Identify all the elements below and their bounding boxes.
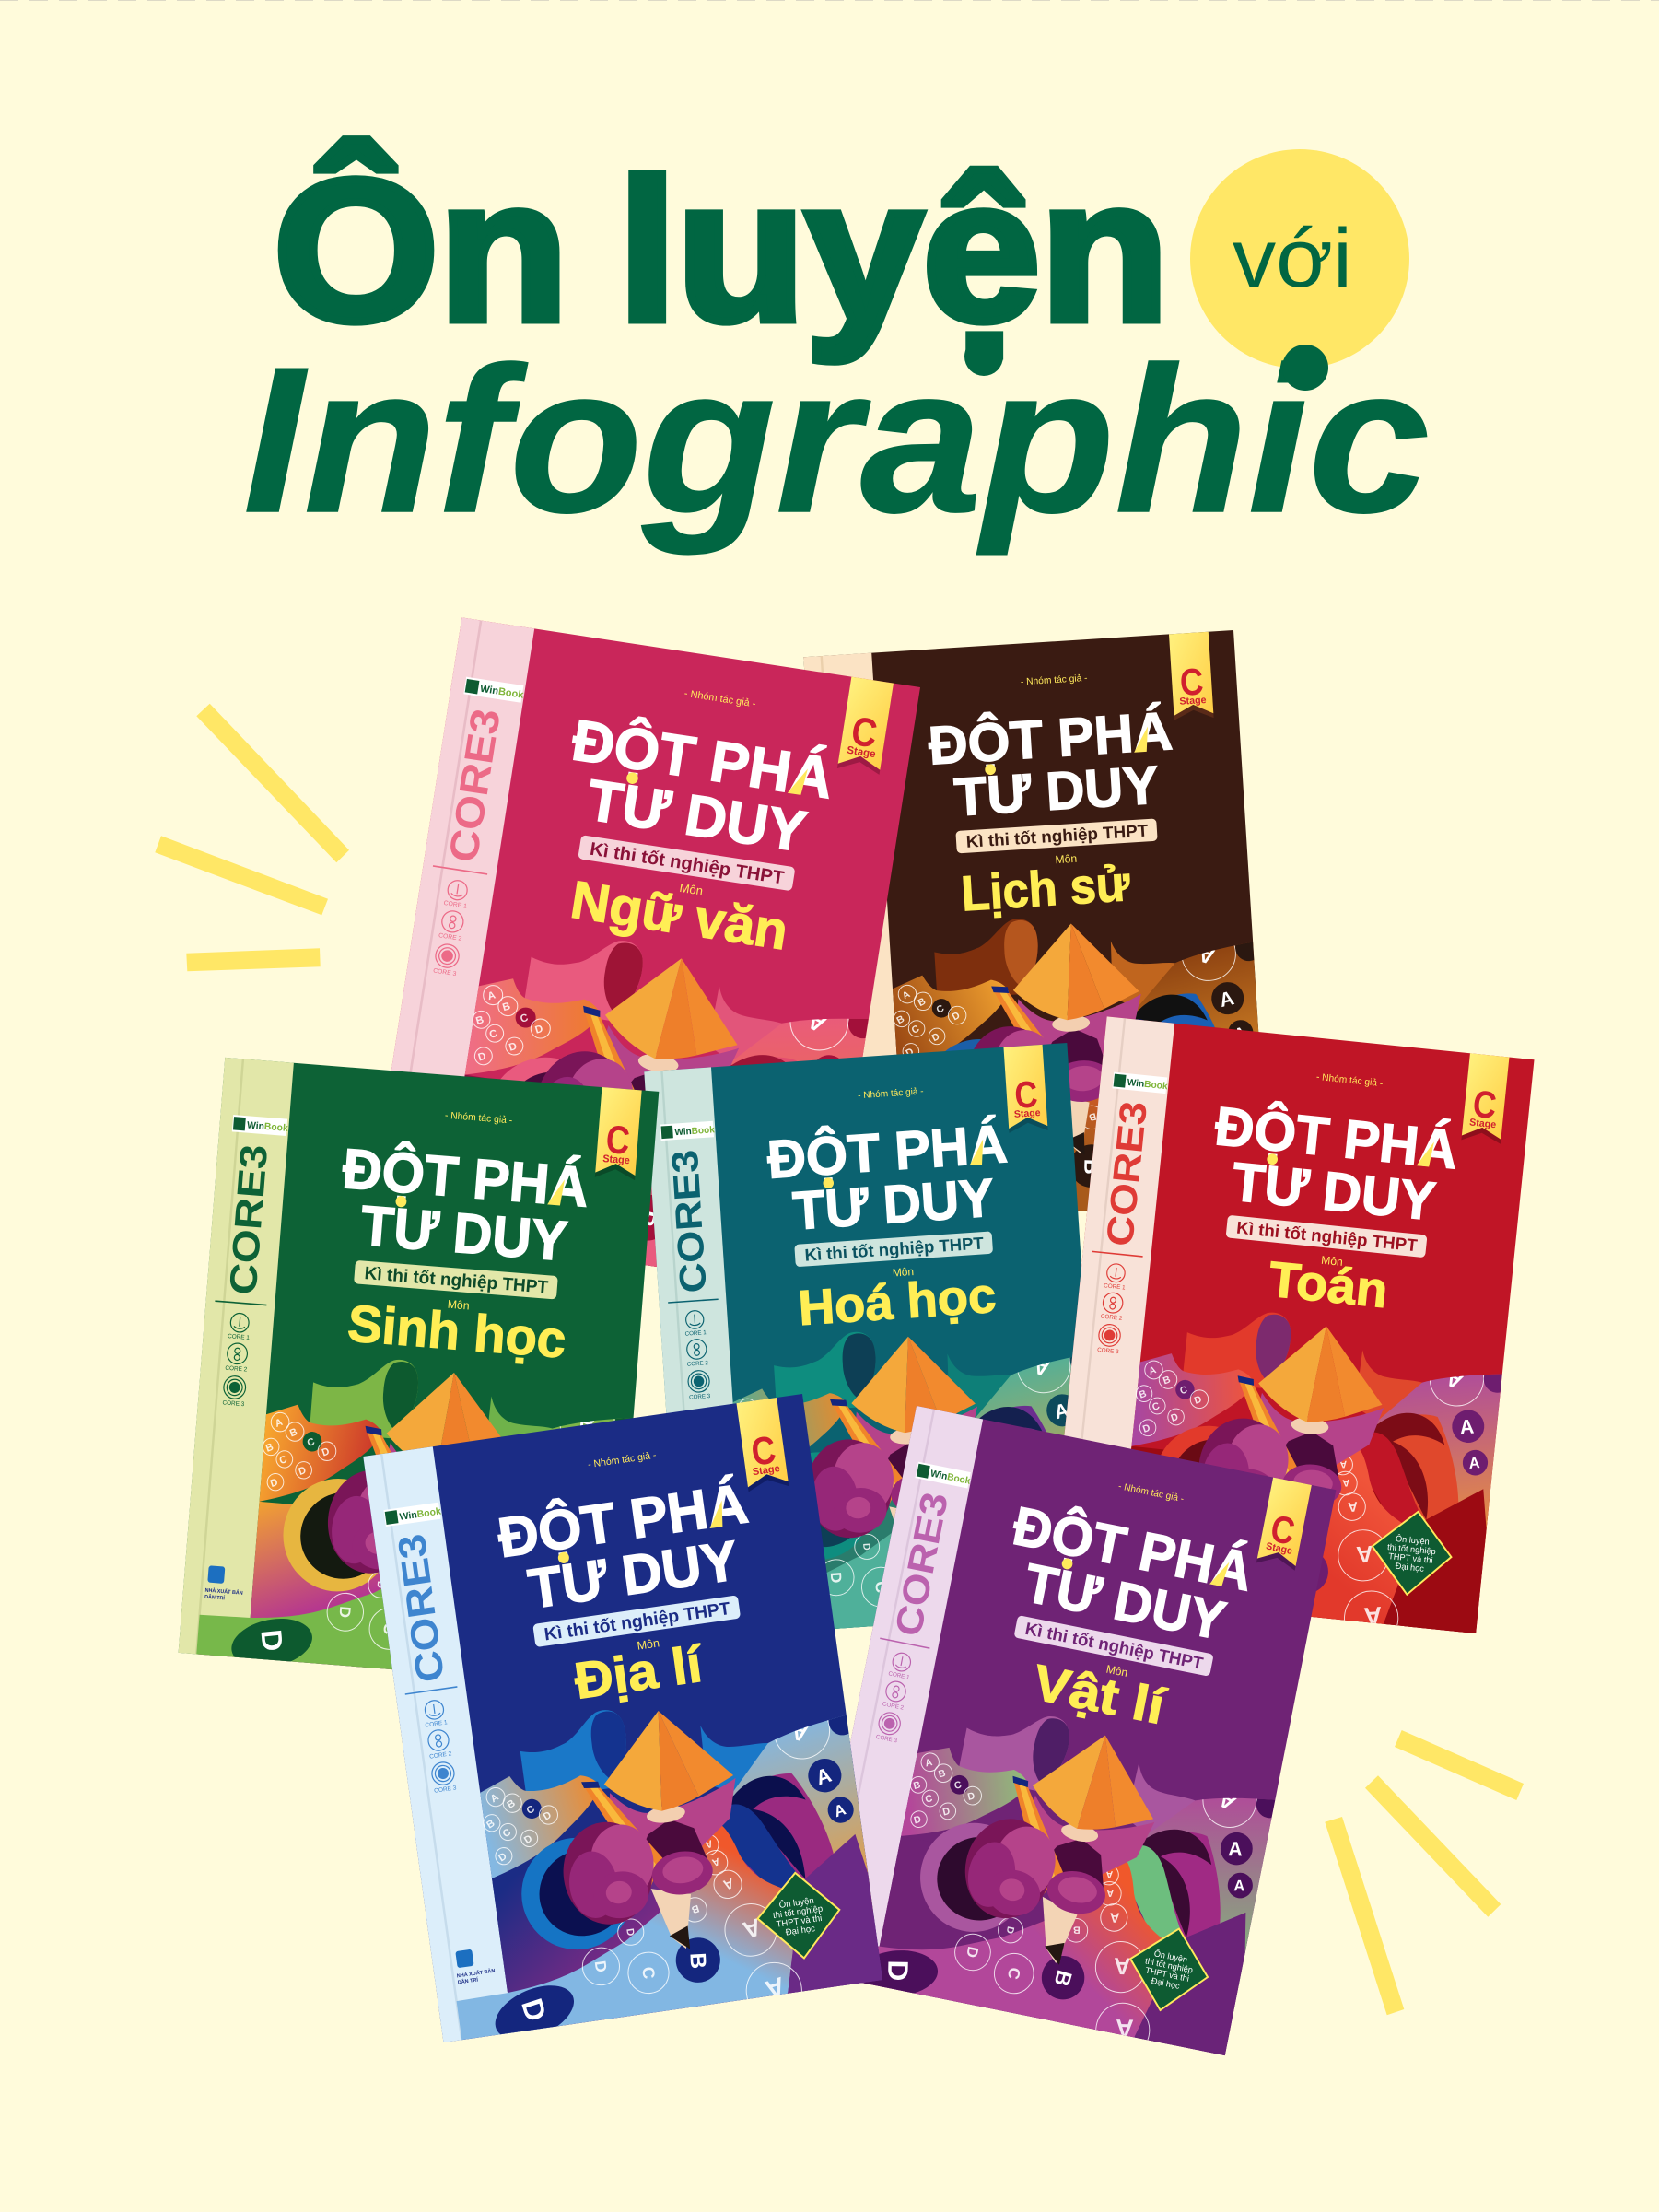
series title: ĐỘT PHÁ: [765, 1114, 1010, 1190]
stage bookmark: C: [1179, 660, 1205, 704]
illustration: [383, 912, 884, 1317]
spine: [805, 1406, 983, 1984]
series title: TƯ DUY: [1020, 1552, 1231, 1652]
series title: TƯ DUY: [952, 755, 1161, 827]
book: Sinh học: [177, 1058, 668, 1711]
spine: WinBook: [399, 1505, 442, 1523]
cover background: [368, 617, 920, 1293]
subject: Toán: [1267, 1251, 1390, 1318]
cover background: [179, 1058, 659, 1687]
subject: Môn: [1105, 1662, 1129, 1679]
illustration: [420, 1675, 895, 2063]
cover background: [1048, 1016, 1535, 1633]
spine: [363, 1446, 513, 2042]
badge: Ôn luyện: [778, 1896, 814, 1911]
stage bookmark: Stage: [846, 745, 877, 760]
illustration: [1064, 1294, 1515, 1656]
yellow circle behind "với": [1190, 149, 1409, 369]
stage bookmark: C: [848, 708, 881, 756]
illustration: [680, 1316, 1114, 1660]
spine: [1048, 1016, 1174, 1598]
badge: thi tốt nghiệp: [1387, 1542, 1436, 1556]
stage bookmark: Stage: [602, 1153, 630, 1166]
spine: CORE 1: [443, 900, 467, 910]
title line 2: Infographic: [243, 323, 1430, 556]
stage bookmark: C: [604, 1117, 631, 1163]
spine: CORE 3: [875, 1734, 898, 1745]
illustration: [819, 1682, 1291, 2079]
series title: ĐỘT PHÁ: [1212, 1094, 1461, 1181]
spine: CORE3: [887, 1489, 956, 1640]
stage bookmark: Stage: [1179, 695, 1207, 708]
stage bookmark: Stage: [1265, 1540, 1293, 1557]
subject: Môn: [1055, 852, 1078, 866]
badge: Đại học: [1395, 1562, 1425, 1574]
author line: - Nhóm tác giả -: [1117, 1481, 1185, 1504]
book: Hoá học: [644, 1042, 1114, 1662]
series title: TƯ DUY: [583, 767, 811, 864]
subject: Lịch sử: [960, 856, 1131, 921]
author line: - Nhóm tác giả -: [444, 1110, 513, 1127]
book: Lịch sử: [803, 629, 1279, 1248]
stage bookmark: [736, 1398, 789, 1492]
spine: CORE 3: [1097, 1347, 1119, 1355]
stage bookmark: [1256, 1478, 1312, 1571]
subject: Sinh học: [345, 1293, 568, 1369]
subject: Hoá học: [797, 1268, 998, 1336]
exam pill: Kì thi tốt nghiệp THPT: [965, 820, 1150, 851]
spine: CORE 3: [434, 1785, 457, 1795]
badge: [1122, 1921, 1216, 2018]
series title: [559, 707, 837, 867]
author line: - Nhóm tác giả -: [1315, 1072, 1384, 1089]
spine: DÂN TRÍ: [457, 1975, 479, 1986]
decorative rays right: [1325, 1730, 1524, 2015]
title line 1: luyện: [618, 139, 1169, 363]
subject: Môn: [637, 1636, 660, 1653]
author line: - Nhóm tác giả -: [683, 688, 757, 710]
spine: CORE 2: [882, 1701, 905, 1712]
badge: [753, 1867, 846, 1964]
spine: CORE 2: [687, 1360, 709, 1368]
series title: TƯ DUY: [791, 1168, 996, 1242]
spine: CORE 1: [425, 1719, 448, 1729]
illustration: [838, 904, 1279, 1247]
spine: DÂN TRÍ: [204, 1593, 226, 1601]
badge: THPT và thi: [1388, 1551, 1433, 1565]
spine: CORE3: [823, 734, 874, 880]
exam pill: Kì thi tốt nghiệp THPT: [804, 1233, 984, 1265]
cover background: [805, 1406, 1336, 2055]
cover background: [803, 630, 1269, 1226]
series title: [1207, 1094, 1461, 1234]
author line: - Nhóm tác giả -: [587, 1450, 658, 1470]
spine: WinBook: [479, 684, 525, 701]
series title: [494, 1471, 759, 1623]
decorative rays left: [155, 704, 349, 971]
exam pill: Kì thi tốt nghiệp THPT: [1023, 1619, 1206, 1673]
subject: Môn: [1321, 1254, 1344, 1269]
exam pill: Kì thi tốt nghiệp THPT: [589, 839, 786, 888]
badge: Đại học: [785, 1924, 816, 1938]
spine: WinBook: [247, 1119, 288, 1134]
book: Ngữ văn: [364, 617, 929, 1317]
spine: CORE 3: [433, 967, 457, 977]
spine: [644, 1067, 748, 1639]
spine: [368, 617, 534, 1234]
spine: CORE 3: [222, 1399, 245, 1408]
badge: thi tốt nghiệp: [1144, 1956, 1194, 1975]
spine: CORE 1: [1104, 1282, 1126, 1292]
spine: CORE 1: [228, 1333, 250, 1341]
spine: CORE 2: [225, 1365, 248, 1374]
badge: Đại học: [1151, 1976, 1181, 1991]
stage bookmark: C: [1471, 1083, 1499, 1127]
spine: CORE 2: [438, 932, 462, 942]
word: với: với: [1233, 213, 1352, 305]
spine: CORE3: [390, 1531, 452, 1685]
series title: TƯ DUY: [524, 1528, 742, 1621]
cover background: [644, 1043, 1104, 1639]
series title: ĐỘT PHÁ: [340, 1137, 591, 1219]
subject: Môn: [679, 881, 704, 898]
subject: Ngữ văn: [567, 871, 792, 962]
illustration: [194, 1346, 646, 1711]
spine: CORE 2: [429, 1750, 452, 1761]
book: Toán: [1046, 1016, 1543, 1656]
stage bookmark: [1003, 1045, 1048, 1133]
stage bookmark: [1169, 632, 1214, 720]
spine: WinBook: [674, 1125, 716, 1138]
badge: Ôn luyện: [1153, 1949, 1188, 1964]
series title: ĐỘT PHÁ: [567, 707, 837, 811]
stage bookmark: C: [749, 1428, 778, 1474]
spine: CORE3: [440, 706, 509, 865]
badge: [1368, 1507, 1455, 1598]
spine: [179, 1058, 294, 1658]
stage bookmark: [837, 677, 894, 775]
stage bookmark: Stage: [1014, 1107, 1041, 1120]
spine: CORE 1: [888, 1670, 910, 1681]
exam pill: Kì thi tốt nghiệp THPT: [1235, 1217, 1419, 1255]
series title: [998, 1494, 1257, 1656]
book: Vật lí: [801, 1406, 1345, 2079]
series title: ĐỘT PHÁ: [1008, 1494, 1257, 1603]
spine: NHÀ XUẤT BẢN: [456, 1968, 496, 1979]
subject: Vật lí: [1029, 1655, 1171, 1736]
spine: CORE3: [663, 1149, 715, 1294]
series title: ĐỘT PHÁ: [927, 699, 1174, 777]
stage bookmark: C: [1013, 1072, 1039, 1117]
stage bookmark: Stage: [752, 1463, 780, 1478]
series title: [927, 699, 1177, 829]
title line 1: [274, 139, 1169, 376]
stage bookmark: Stage: [1469, 1117, 1497, 1130]
badge: THPT và thi: [776, 1914, 823, 1930]
exam pill: Kì thi tốt nghiệp THPT: [364, 1264, 549, 1298]
badge: Ôn luyện: [1396, 1534, 1430, 1547]
series title: [765, 1114, 1012, 1243]
series title: TƯ DUY: [358, 1194, 569, 1273]
title line 1: Ôn: [274, 139, 568, 363]
series title: TƯ DUY: [1229, 1152, 1438, 1233]
stage bookmark: [595, 1087, 642, 1180]
spine: CORE3: [1098, 1099, 1155, 1248]
author line: - Nhóm tác giả -: [858, 1086, 924, 1101]
spine: [803, 653, 907, 1226]
spine: CORE 1: [684, 1329, 707, 1338]
spine: WinBook: [929, 1469, 972, 1487]
badge: THPT và thi: [1145, 1965, 1190, 1984]
stage bookmark: [1461, 1053, 1509, 1144]
spine: WinBook: [1127, 1078, 1168, 1092]
subject: Môn: [892, 1265, 915, 1280]
series title: ĐỘT PHÁ: [494, 1471, 752, 1569]
badge: thi tốt nghiệp: [772, 1904, 824, 1921]
author line: - Nhóm tác giả -: [1021, 673, 1088, 687]
series title: [336, 1137, 591, 1274]
exam pill: Kì thi tốt nghiệp THPT: [543, 1599, 731, 1645]
spine: CORE 3: [689, 1393, 711, 1401]
stage bookmark: C: [1268, 1506, 1298, 1553]
spine: NHÀ XUẤT BẢN: [204, 1587, 243, 1597]
subject: Địa lí: [571, 1634, 707, 1710]
spine: CORE3: [221, 1143, 275, 1296]
cover background: [363, 1394, 882, 2042]
spine: CORE 2: [1100, 1314, 1123, 1322]
subject: Môn: [447, 1298, 470, 1313]
book: Địa lí: [363, 1393, 895, 2066]
